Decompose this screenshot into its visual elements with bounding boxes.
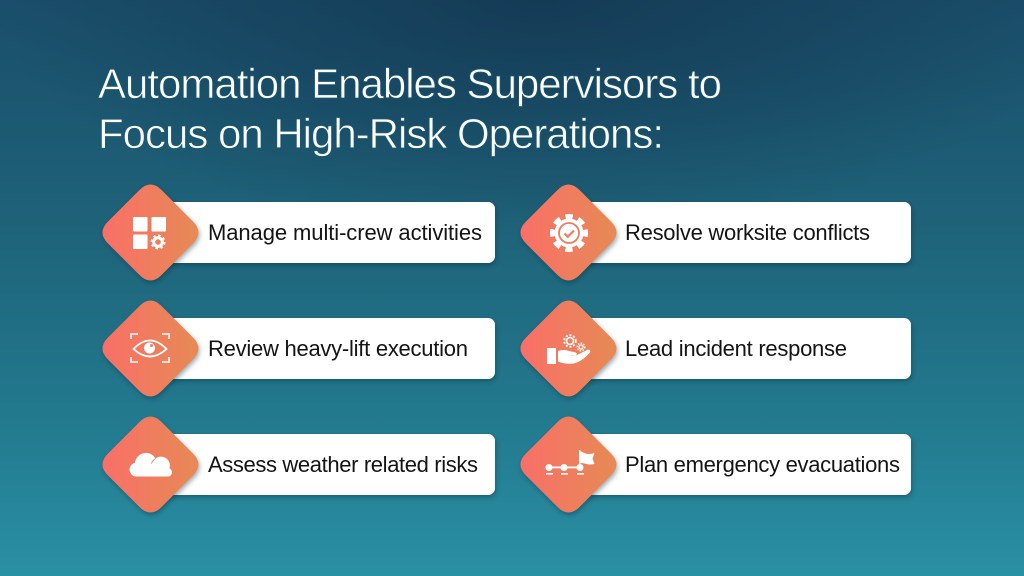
diamond badge — [102, 300, 198, 396]
icon: grid with gear — [133, 217, 166, 249]
card: resolve worksite conflicts — [520, 184, 911, 280]
icon: eye in scan frame — [131, 334, 169, 362]
card: plan emergency evacuations — [520, 416, 911, 512]
icon: gear with check — [552, 216, 586, 250]
label bar: Assess weather related risks — [208, 452, 478, 477]
diamond badge — [520, 300, 616, 396]
label bar: Plan emergency evacuations — [625, 452, 900, 477]
diamond badge — [102, 416, 198, 512]
diamond badge — [520, 184, 616, 280]
title: Automation Enables Supervisors to — [98, 60, 722, 107]
card: lead incident response — [520, 300, 911, 396]
card: assess weather related risks — [102, 416, 495, 512]
icon: hand with gears — [547, 335, 590, 364]
label bar: Resolve worksite conflicts — [625, 220, 870, 245]
label bar — [580, 318, 911, 379]
diamond badge — [520, 416, 616, 512]
label bar: Lead incident response — [625, 336, 847, 361]
card: manage multi-crew activities — [102, 184, 495, 280]
label bar: Manage multi-crew activities — [208, 220, 482, 245]
label bar — [160, 202, 495, 263]
diamond badge — [102, 184, 198, 280]
label bar — [580, 434, 911, 495]
label bar — [160, 434, 495, 495]
label bar — [160, 318, 495, 379]
card: review heavy-lift execution — [102, 300, 495, 396]
label bar: Review heavy-lift execution — [208, 336, 468, 361]
title: Focus on High-Risk Operations: — [98, 110, 664, 157]
icon: milestone route with flag — [546, 450, 594, 475]
label bar — [580, 202, 911, 263]
icon: cloud — [130, 453, 172, 476]
title — [98, 60, 722, 157]
